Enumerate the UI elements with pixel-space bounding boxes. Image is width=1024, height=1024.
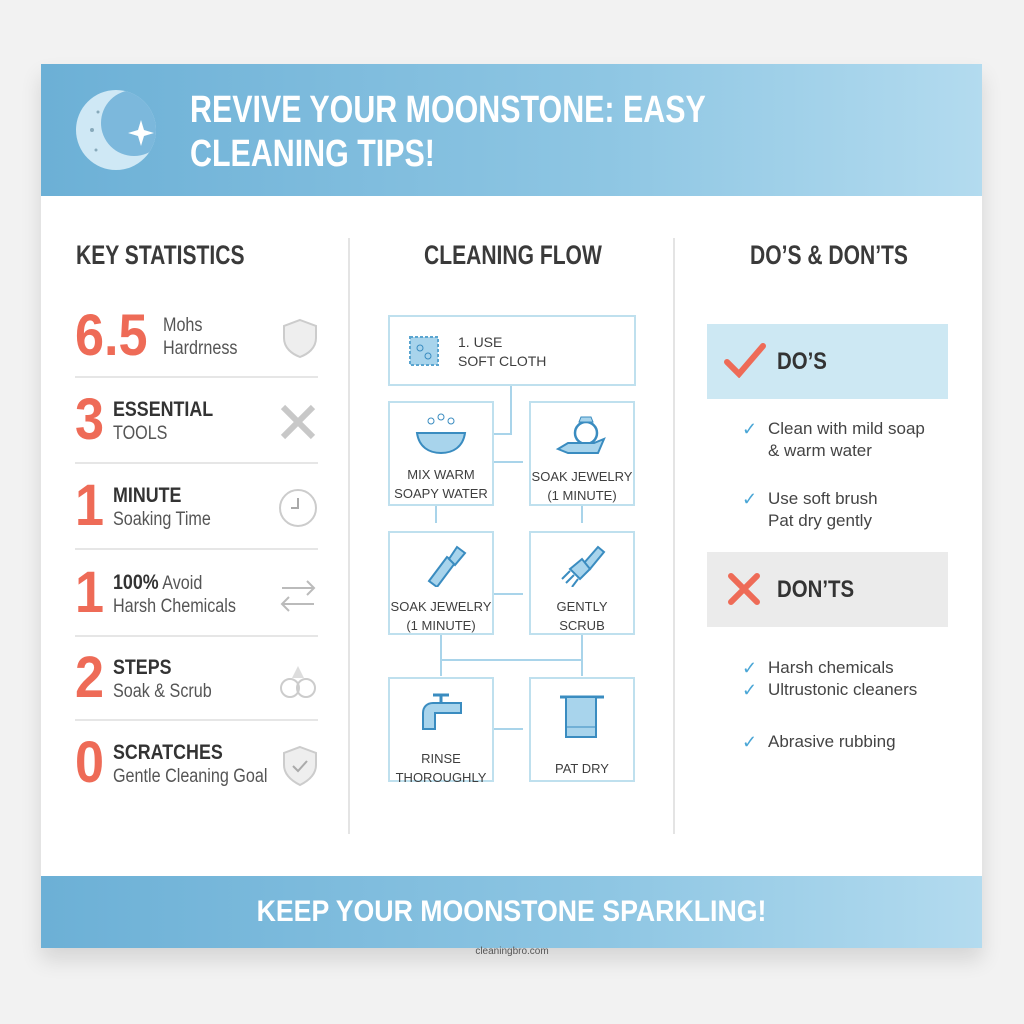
title: CLEANING TIPS! xyxy=(190,133,435,175)
panel: don'ts xyxy=(707,552,948,627)
list: don'ts items: Abrasive rubbing xyxy=(768,732,896,751)
step: gently scrub: SCRUB xyxy=(559,618,605,633)
step 1: soft cloth: SOFT CLOTH xyxy=(458,353,546,369)
step: soak jewelry 2: (1 MINUTE) xyxy=(406,618,476,633)
stat: 0 scratches: SCRATCHES xyxy=(113,741,223,764)
stat: 1 minute: Soaking Time xyxy=(113,509,211,530)
stat: 3: ESSENTIAL xyxy=(113,398,213,421)
stat: 6.5: 6.5 xyxy=(75,303,148,368)
panel: key statistics xyxy=(75,303,317,795)
list: don'ts items: Ultrustonic cleaners xyxy=(768,680,917,699)
list: do's items: Pat dry gently xyxy=(768,511,872,530)
list: don'ts items: ✓ xyxy=(742,658,757,678)
step: soak jewelry 2 xyxy=(388,531,494,635)
list: do's items: Use soft brush xyxy=(768,489,878,508)
panel: cleaning flow xyxy=(388,315,636,785)
stat: 100% xyxy=(75,560,316,625)
panel: do's: DO’S xyxy=(777,348,827,375)
footer banner xyxy=(41,876,982,948)
stat: 2 steps: STEPS xyxy=(113,656,172,679)
list: don'ts items: Harsh chemicals xyxy=(768,658,894,677)
step: mix warm soapy water xyxy=(388,401,494,506)
panel: don'ts: DON’TS xyxy=(777,576,854,603)
stat: 2 steps: Soak & Scrub xyxy=(113,681,212,702)
list: do's items: ✓ xyxy=(742,489,757,509)
step: rinse xyxy=(388,677,494,782)
stat: 6.5: Mohs xyxy=(163,315,202,336)
list: don'ts items: ✓ xyxy=(742,732,757,752)
step: pat dry: PAT DRY xyxy=(555,761,609,776)
list: do's items: Clean with mild soap xyxy=(768,419,925,438)
panel: do's xyxy=(707,324,948,399)
icon: moon xyxy=(76,90,156,170)
stat: 100%: Harsh Chemicals xyxy=(113,596,236,617)
list: do's items: & warm water xyxy=(768,441,872,460)
stat: 1 minute: MINUTE xyxy=(113,484,181,507)
step 1: soft cloth xyxy=(388,315,636,386)
stat: 100%: 100% Avoid xyxy=(113,571,202,594)
list: don'ts items xyxy=(742,658,917,752)
credit: cleaningbro.com xyxy=(475,946,549,957)
footer banner: KEEP YOUR MOONSTONE SPARKLING! xyxy=(257,895,766,928)
stat: 0 scratches: 0 xyxy=(75,730,104,795)
step: pat dry xyxy=(529,677,635,782)
stat: 1 minute xyxy=(75,473,317,538)
step: soak jewelry: (1 MINUTE) xyxy=(547,488,617,503)
step: gently scrub xyxy=(529,531,635,635)
step: soak jewelry xyxy=(529,401,635,506)
step: rinse: RINSE xyxy=(421,751,461,766)
list: don'ts items: ✓ xyxy=(742,680,757,700)
stat: 6.5 xyxy=(75,303,317,368)
title: REVIVE YOUR MOONSTONE: EASY xyxy=(190,89,706,131)
heading: cleaning flow: CLEANING FLOW xyxy=(424,240,602,270)
stat: 3: TOOLS xyxy=(113,423,167,444)
stat: 0 scratches: Gentle Cleaning Goal xyxy=(113,766,267,787)
stat: 3: 3 xyxy=(75,387,104,452)
list: do's items: ✓ xyxy=(742,419,757,439)
stat: 2 steps xyxy=(75,645,316,710)
stat: 1 minute: 1 xyxy=(75,473,104,538)
stat: 3 xyxy=(75,387,315,452)
stat: 6.5: Hardrness xyxy=(163,338,238,359)
step: gently scrub: GENTLY xyxy=(556,599,608,614)
stat: 2 steps: 2 xyxy=(75,645,104,710)
header banner xyxy=(41,64,982,196)
heading: key statistics: KEY STATISTICS xyxy=(76,240,245,270)
list: do's items xyxy=(742,419,925,530)
heading: dos and donts: DO’S & DON’TS xyxy=(750,240,908,270)
stat: 0 scratches xyxy=(75,730,317,795)
step: mix warm soapy water: SOAPY WATER xyxy=(394,486,488,501)
step: soak jewelry: SOAK JEWELRY xyxy=(532,469,632,484)
stat: 100%: 1 xyxy=(75,560,104,625)
step: rinse: THOROUGHLY xyxy=(396,770,486,785)
step 1: soft cloth: 1. USE xyxy=(458,334,502,350)
step: soak jewelry 2: SOAK JEWELRY xyxy=(391,599,491,614)
title xyxy=(190,89,706,175)
step: mix warm soapy water: MIX WARM xyxy=(407,467,475,482)
